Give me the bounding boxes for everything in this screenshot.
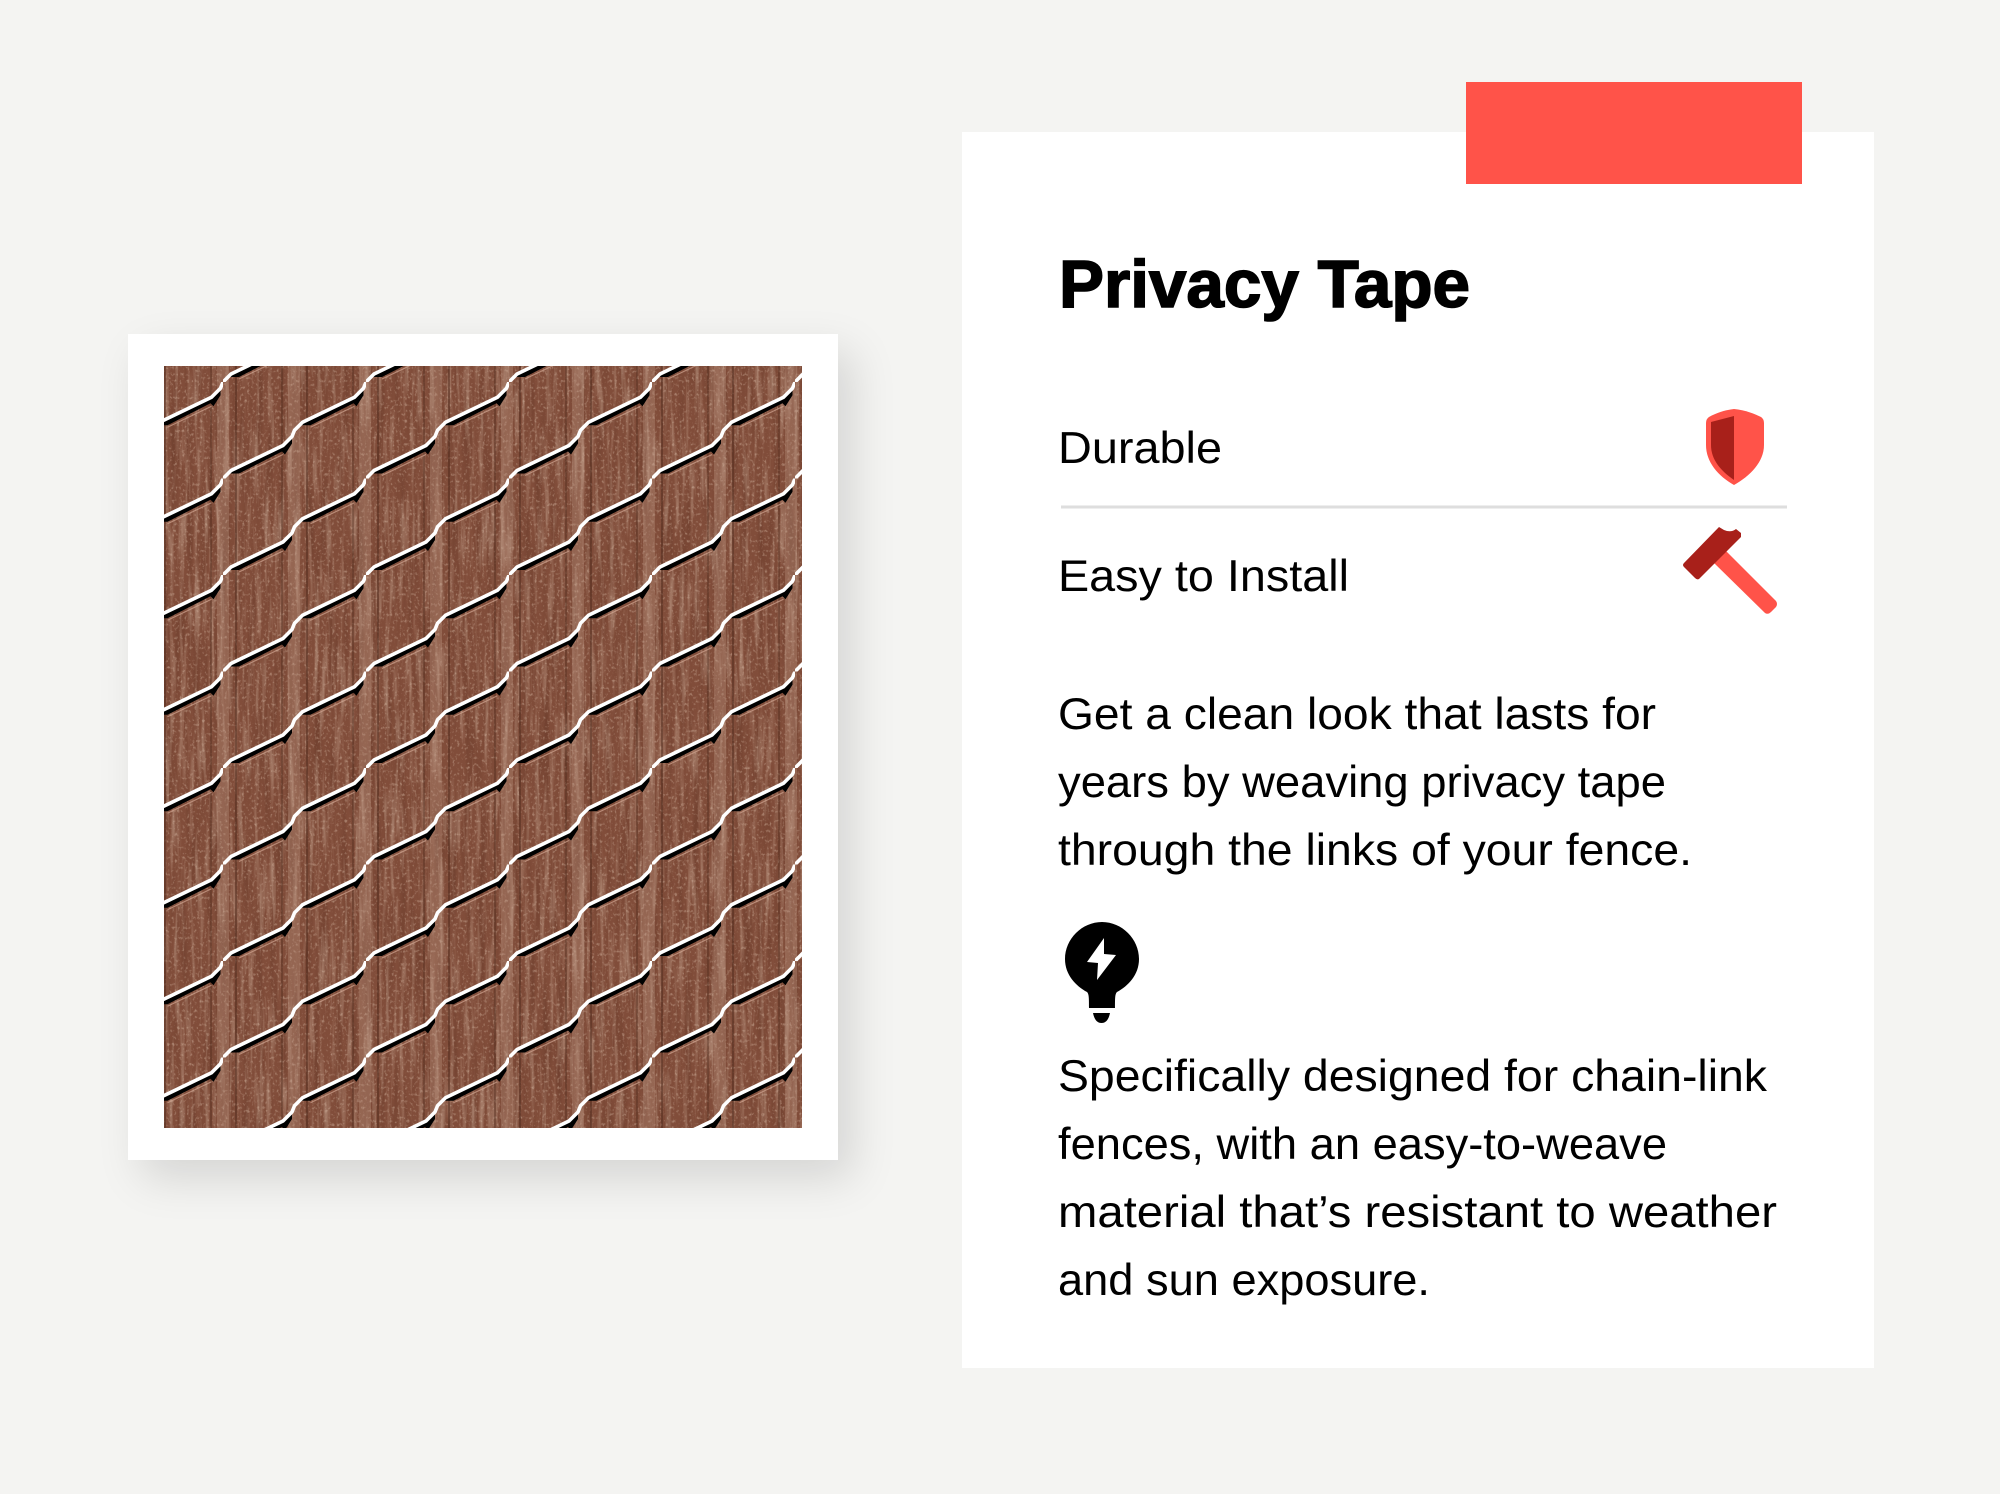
fence photo: [164, 366, 802, 1128]
paragraph: tip: [1058, 1052, 1777, 1305]
paragraph: description: [1058, 690, 1692, 875]
red tab: [1466, 82, 1802, 184]
artwork layer: [164, 82, 1874, 1368]
icon: shield: [1706, 409, 1764, 485]
feature: easy to install: Easy to Install: [1058, 552, 1349, 601]
photo card: [128, 334, 838, 1160]
info panel: [962, 82, 1874, 1368]
paragraph: tip: Specifically designed for chain-link: [1058, 1052, 1768, 1101]
paragraph: description: years by weaving privacy tape: [1058, 758, 1666, 807]
title: Privacy Tape: [1059, 247, 1470, 322]
paragraph: description: Get a clean look that lasts for: [1058, 690, 1656, 739]
paragraph: tip: material that’s resistant to weather: [1058, 1188, 1777, 1237]
feature: durable: Durable: [1058, 424, 1222, 473]
icon: light bulb with bolt: [1065, 922, 1139, 1023]
paragraph: tip: fences, with an easy-to-weave: [1058, 1120, 1667, 1169]
icon: hammer: [1683, 527, 1777, 614]
paragraph: description: through the links of your fence.: [1058, 826, 1692, 875]
paragraph: tip: and sun exposure.: [1058, 1256, 1430, 1305]
